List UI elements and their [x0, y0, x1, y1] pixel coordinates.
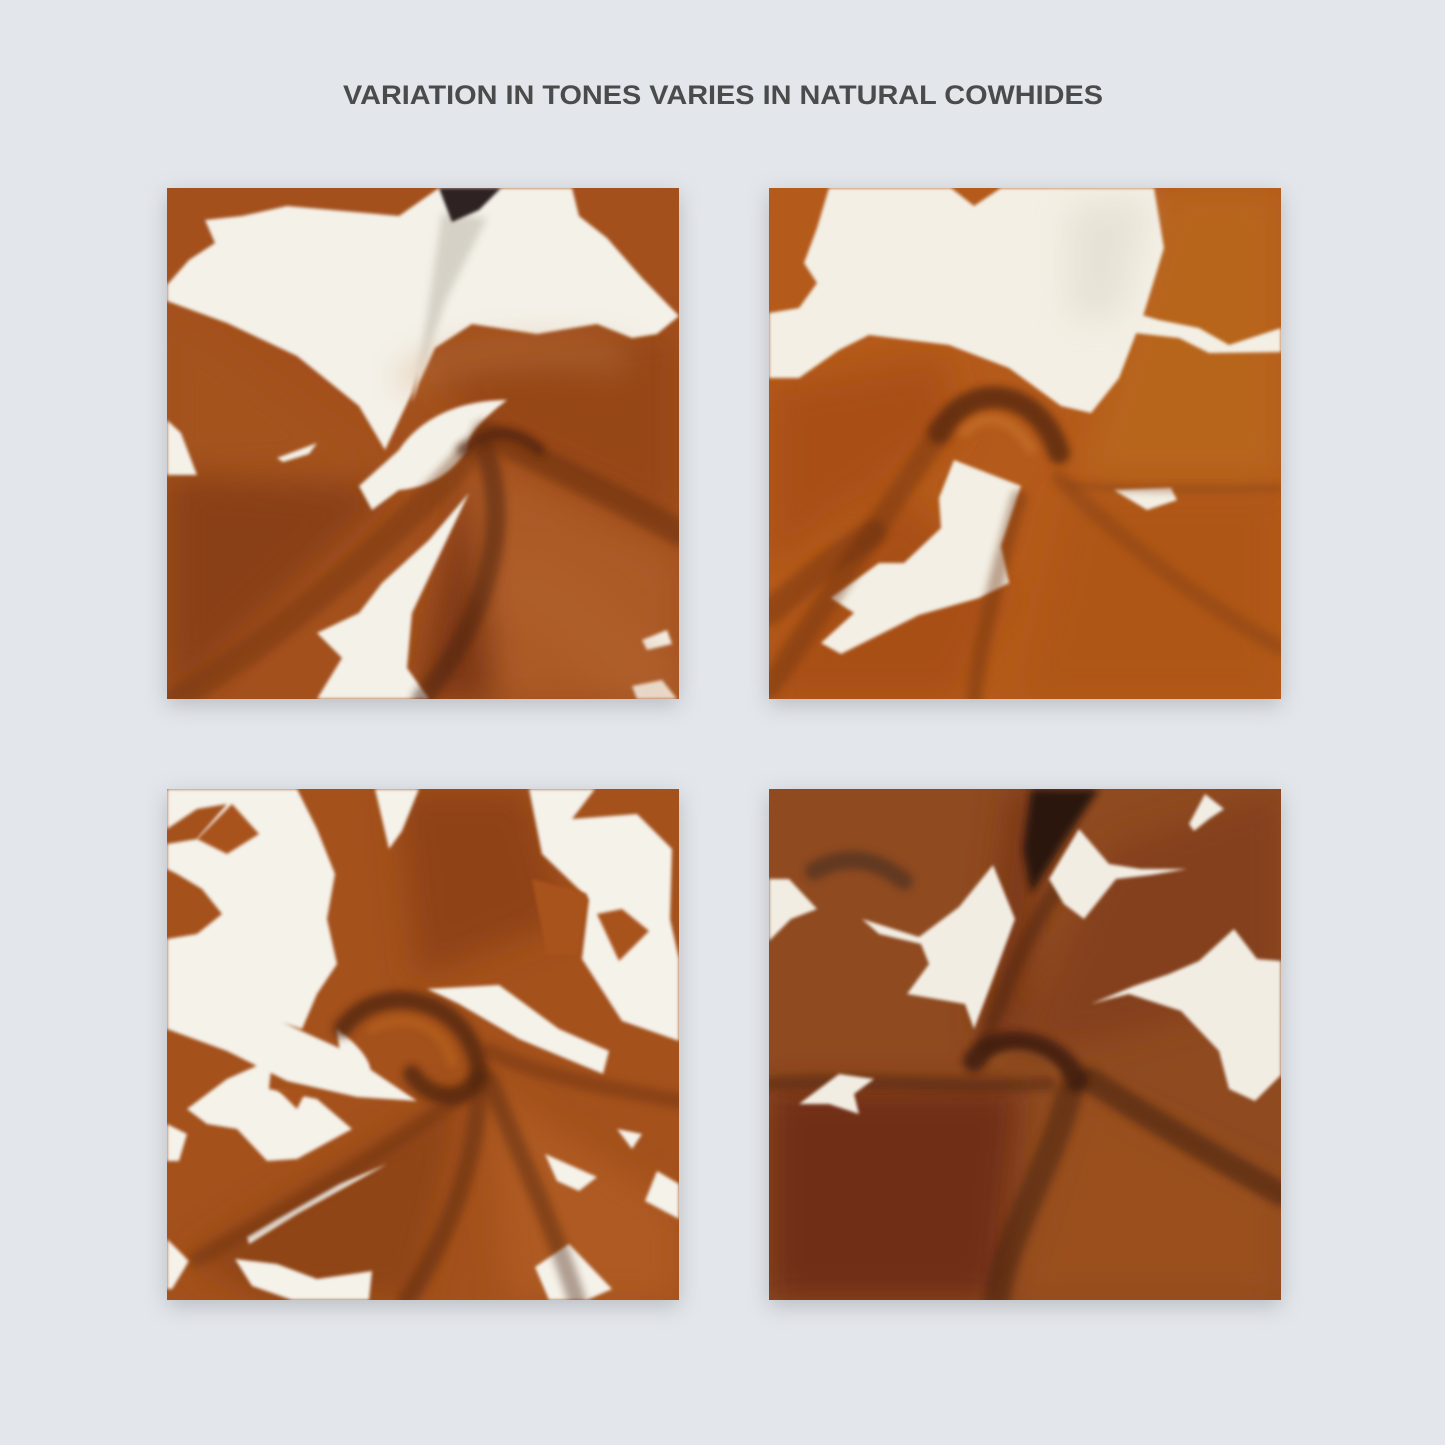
panel: cowhide swatch bottom left: [167, 789, 679, 1306]
tonal drapery wedges: [769, 188, 1281, 699]
panel: cowhide swatch top right: [769, 188, 1281, 705]
tonal drapery wedges: [167, 308, 679, 699]
soft grey shading in the white fan: [417, 213, 487, 383]
white patches: [167, 188, 679, 699]
hide base colour: [769, 789, 1281, 1300]
brown spots within white: [197, 804, 649, 1109]
hide base colour: [167, 188, 679, 699]
dark top patch: [439, 188, 501, 222]
swirl and folds: [769, 397, 1281, 699]
tonal drapery wedges: [769, 789, 1281, 1300]
panel: cowhide swatch bottom right: [769, 789, 1281, 1306]
hide base colour: [769, 188, 1281, 699]
swirl and folds: [197, 1000, 679, 1300]
dark fold shadows: [769, 789, 1281, 1300]
central swirl: [974, 1042, 1077, 1081]
shading on white fur: [1069, 198, 1149, 318]
tonal drapery wedges: [187, 789, 679, 1300]
hide base colour: [167, 789, 679, 1300]
panel: cowhide swatch top left: [167, 188, 679, 705]
white patches: [167, 789, 679, 1300]
swirl and folds: [177, 353, 679, 699]
white patches: [769, 188, 1281, 654]
white patches: [769, 794, 1281, 1114]
title: VARIATION IN TONES VARIES IN NATURAL COWHIDES: [343, 80, 1103, 110]
